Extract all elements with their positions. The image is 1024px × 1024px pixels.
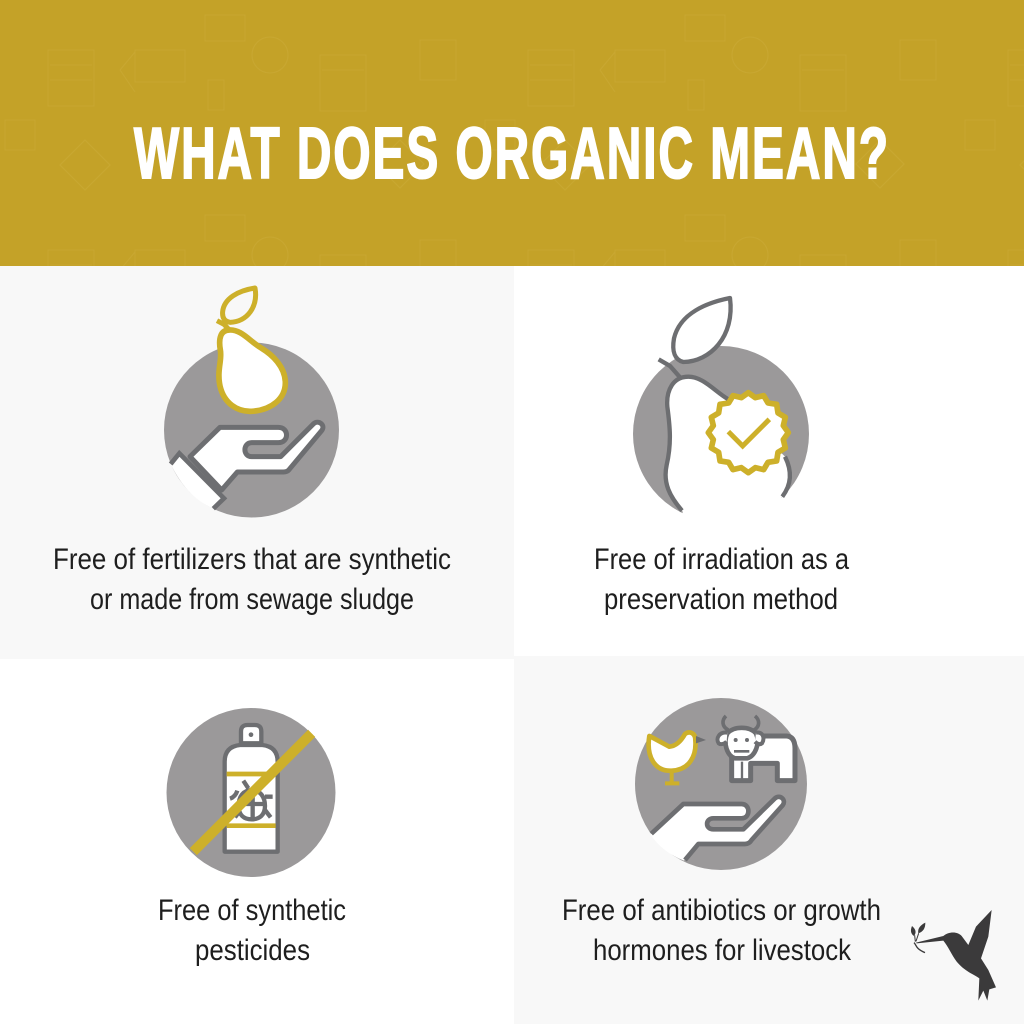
text: fertilizers: or made from sewage sludge [90,583,414,616]
text: irradiation [594,543,849,616]
text: livestock [562,894,881,967]
panel: livestock [514,656,1024,1024]
icon: pear with check badge [633,298,809,540]
text: pesticides [158,894,346,967]
text: pesticides: pesticides [195,934,310,967]
icon: crossed-out spray can [166,708,336,877]
panel: header banner [0,0,1024,266]
icon: hummingbird logo with sprig [911,910,996,1001]
text: fertilizers [53,543,451,616]
text: fertilizers: Free of fertilizers that are synthetic [53,543,451,576]
text: irradiation: preservation method [604,583,838,616]
text: pesticides: Free of synthetic [158,894,346,927]
text: irradiation: Free of irradiation as a [594,543,849,576]
text: livestock: hormones for livestock [593,934,852,967]
panel: fertilizers [0,266,514,659]
panel: pesticides [158,708,346,967]
icon: chicken and cow above open hand [635,698,807,870]
panel: irradiation [594,298,849,616]
text: livestock: Free of antibiotics or growth [562,894,881,927]
icon: pear above open hand [164,288,339,518]
